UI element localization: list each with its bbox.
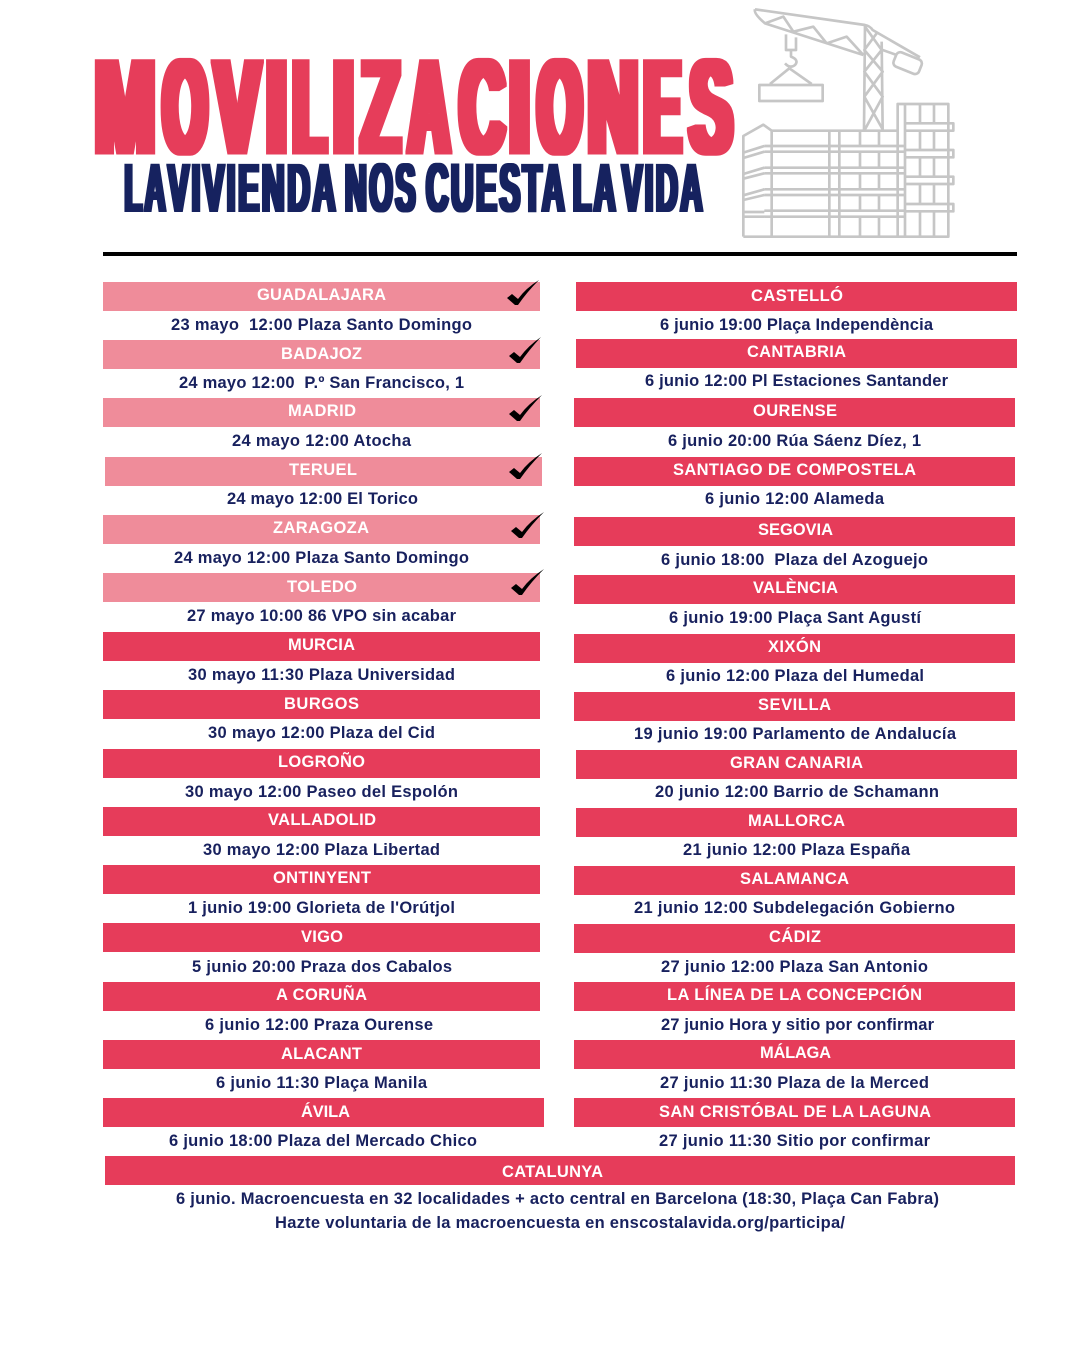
title: O xyxy=(538,33,582,182)
row: Guadalajara: GUADALAJARA xyxy=(257,286,386,304)
subtitle: CUESTA xyxy=(426,150,566,226)
row: Murcia: MURCIA xyxy=(288,636,355,654)
row: Teruel xyxy=(105,457,542,508)
row: Ourense: OURENSE xyxy=(753,402,837,420)
row: Toledo: 27 mayo 10:00 86 VPO sin acabar xyxy=(187,607,457,625)
subtitle: VIVIENDA xyxy=(168,150,337,226)
panel: Catalunya: CATALUNYA xyxy=(502,1163,603,1181)
row: Santiago de Compostela: 6 junio 12:00 Alameda xyxy=(705,490,885,508)
row: Burgos xyxy=(103,690,540,742)
row: Málaga: MÁLAGA xyxy=(760,1043,831,1062)
row: Badajoz: 24 mayo 12:00 P.º San Francisco, 1 xyxy=(179,374,464,392)
row: Santiago de Compostela: SANTIAGO DE COMPOSTELA xyxy=(673,461,916,479)
title: I xyxy=(266,33,287,182)
row: Xixón: 6 junio 12:00 Plaza del Humedal xyxy=(666,667,924,685)
row: Vigo xyxy=(103,923,540,976)
row: Madrid: MADRID xyxy=(288,402,356,420)
row: Toledo: TOLEDO xyxy=(287,578,357,596)
title: C xyxy=(460,33,504,182)
title: E xyxy=(644,33,680,182)
row: Cádiz: CÁDIZ xyxy=(769,927,821,946)
subtitle: LA xyxy=(124,150,167,226)
row: Badajoz xyxy=(103,340,540,392)
row: Ourense xyxy=(574,398,1015,450)
row: Alacant: 6 junio 11:30 Plaça Manila xyxy=(216,1074,428,1092)
text: VIDA xyxy=(622,150,705,226)
row: Segovia: 6 junio 18:00 Plaza del Azoguejo xyxy=(661,551,928,569)
row: Sevilla: 19 junio 19:00 Parlamento de Andalucía xyxy=(634,725,957,743)
title xyxy=(95,33,732,182)
row: Gran Canaria: GRAN CANARIA xyxy=(730,754,863,772)
row: San Cristóbal de la Laguna: 27 junio 11:30 Sitio por confirmar xyxy=(659,1132,931,1150)
row: Gran Canaria xyxy=(576,750,1017,801)
row: Cádiz xyxy=(574,924,1015,976)
row: Segovia: SEGOVIA xyxy=(758,521,833,539)
row: Málaga xyxy=(574,1040,1015,1092)
subtitle xyxy=(124,150,705,226)
row: Madrid xyxy=(103,398,540,450)
row: Castelló xyxy=(576,282,1017,334)
row: La Línea de la Concepción xyxy=(574,982,1015,1034)
row: Guadalajara xyxy=(103,282,540,334)
icon: check marks on completed rows xyxy=(507,280,544,595)
row: Castelló: 6 junio 19:00 Plaça Independència xyxy=(660,316,934,334)
row: Mallorca: MALLORCA xyxy=(748,812,845,830)
row: Cantabria: 6 junio 12:00 Pl Estaciones Santander xyxy=(645,372,949,390)
row: Logroño: LOGROÑO xyxy=(278,751,365,771)
row: Teruel: TERUEL xyxy=(289,461,357,479)
row: València: 6 junio 19:00 Plaça Sant Agustí xyxy=(669,609,922,627)
row: Ontinyent xyxy=(103,865,540,917)
row: Segovia xyxy=(574,517,1015,569)
title: L xyxy=(294,33,326,182)
row: Logroño xyxy=(103,749,540,801)
row: Ontinyent: ONTINYENT xyxy=(273,869,371,887)
row: Burgos: BURGOS xyxy=(284,695,359,713)
row: La Línea de la Concepción: LA LÍNEA DE LA CONCEPCIÓN xyxy=(667,985,922,1004)
row: A Coruña xyxy=(103,982,540,1034)
subtitle: LA xyxy=(573,150,617,226)
panel: Catalunya: 6 junio. Macroencuesta en 32 localidades + acto central en Barcelona (18:30, Plaça Can Fabra) xyxy=(176,1190,939,1208)
title: I xyxy=(333,33,354,182)
row: València: VALÈNCIA xyxy=(753,578,838,597)
row: Zaragoza: 24 mayo 12:00 Plaza Santo Domingo xyxy=(174,549,469,567)
row: Salamanca: 21 junio 12:00 Subdelegación Gobierno xyxy=(634,899,955,917)
row: Ourense: 6 junio 20:00 Rúa Sáenz Díez, 1 xyxy=(668,432,921,450)
row: Madrid: 24 mayo 12:00 Atocha xyxy=(232,432,412,450)
row: Ontinyent: 1 junio 19:00 Glorieta de l'Orútjol xyxy=(188,899,455,917)
title: O xyxy=(163,33,207,182)
row: Mallorca xyxy=(576,808,1017,859)
row: Gran Canaria: 20 junio 12:00 Barrio de Schamann xyxy=(655,783,939,801)
row: Valladolid: 30 mayo 12:00 Plaza Libertad xyxy=(203,841,440,859)
row: Xixón xyxy=(574,634,1015,685)
panel: Catalunya xyxy=(105,1156,1015,1232)
row: Zaragoza xyxy=(103,515,540,567)
row: Vigo: VIGO xyxy=(301,928,343,946)
title: A xyxy=(409,33,449,182)
title: M xyxy=(95,33,155,182)
row: Sevilla: SEVILLA xyxy=(758,696,831,714)
row: Cantabria xyxy=(576,339,1017,390)
panel: left column of cities xyxy=(103,282,544,1150)
row: Alacant xyxy=(103,1040,540,1092)
row: La Línea de la Concepción: 27 junio Hora y sitio por confirmar xyxy=(661,1016,935,1034)
row: Sevilla xyxy=(574,692,1015,743)
row: Alacant: ALACANT xyxy=(281,1045,362,1063)
title: I xyxy=(509,33,530,182)
row: Ávila xyxy=(103,1098,544,1150)
row: Teruel: 24 mayo 12:00 El Torico xyxy=(227,490,418,508)
row: Salamanca xyxy=(574,866,1015,917)
row: Vigo: 5 junio 20:00 Praza dos Cabalos xyxy=(192,958,452,976)
row: Ávila: ÁVILA xyxy=(301,1102,350,1121)
panel: Catalunya: Hazte voluntaria de la macroencuesta en enscostalavida.org/participa/ xyxy=(275,1214,845,1232)
row: Castelló: CASTELLÓ xyxy=(751,286,843,305)
row: Santiago de Compostela xyxy=(574,457,1015,508)
row: Valladolid xyxy=(103,807,540,859)
row: San Cristóbal de la Laguna: SAN CRISTÓBAL DE LA LAGUNA xyxy=(659,1102,931,1121)
row: Toledo xyxy=(103,573,540,625)
row: Badajoz: BADAJOZ xyxy=(281,345,362,363)
row: Ávila: 6 junio 18:00 Plaza del Mercado Chico xyxy=(169,1132,477,1150)
subtitle: NOS xyxy=(345,150,418,226)
row: Guadalajara: 23 mayo 12:00 Plaza Santo Domingo xyxy=(171,316,472,334)
row: Salamanca: SALAMANCA xyxy=(740,870,849,888)
row: Cantabria: CANTABRIA xyxy=(747,343,846,361)
row: Murcia xyxy=(103,632,540,684)
row: Xixón: XIXÓN xyxy=(768,637,821,656)
icon: crane and building under construction xyxy=(743,9,953,237)
divider rule xyxy=(103,252,1017,256)
title: Z xyxy=(362,33,400,182)
row: Málaga: 27 junio 11:30 Plaza de la Merced xyxy=(660,1074,929,1092)
row: Mallorca: 21 junio 12:00 Plaza España xyxy=(683,841,911,859)
title: V xyxy=(215,33,260,182)
row: Cádiz: 27 junio 12:00 Plaza San Antonio xyxy=(661,958,928,976)
text: S xyxy=(690,33,732,182)
row: Zaragoza: ZARAGOZA xyxy=(273,519,369,537)
row: Valladolid: VALLADOLID xyxy=(268,811,376,829)
title: N xyxy=(588,33,638,182)
panel: right column of cities xyxy=(574,282,1017,1150)
row: Murcia: 30 mayo 11:30 Plaza Universidad xyxy=(188,666,455,684)
row: A Coruña: A CORUÑA xyxy=(276,984,367,1004)
row: San Cristóbal de la Laguna xyxy=(574,1098,1015,1150)
row: Logroño: 30 mayo 12:00 Paseo del Espolón xyxy=(185,783,458,801)
row: València xyxy=(574,575,1015,627)
row: Burgos: 30 mayo 12:00 Plaza del Cid xyxy=(208,724,435,742)
row: A Coruña: 6 junio 12:00 Praza Ourense xyxy=(205,1016,433,1034)
